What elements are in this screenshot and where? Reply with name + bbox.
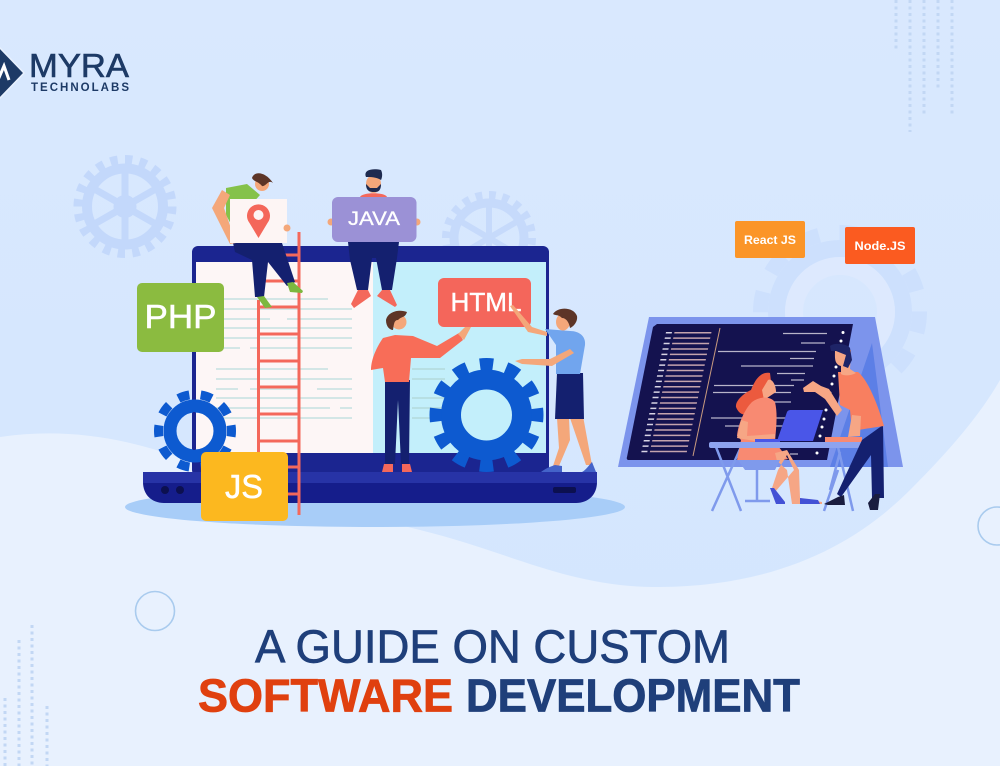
- laptop base highlight: [143, 472, 597, 483]
- text lines on screen left: [215, 299, 352, 418]
- title line 1: A GUIDE ON CUSTOM: [255, 620, 730, 672]
- ladder: [258, 232, 299, 515]
- head: [392, 314, 406, 330]
- white sign: [230, 199, 287, 243]
- hair and beard: [830, 344, 852, 368]
- logo: [0, 47, 129, 98]
- HTML badge: [438, 278, 531, 327]
- person in blue shirt: [510, 305, 596, 472]
- forearm: [848, 415, 861, 437]
- shoes: [351, 290, 397, 308]
- title line 2: DEVELOPMENT: [466, 670, 800, 722]
- legs: [233, 243, 295, 297]
- man standing at board: [803, 344, 884, 510]
- hand: [284, 224, 290, 232]
- shoes: [382, 464, 412, 472]
- background gear left: [78, 160, 172, 254]
- shirt and arm: [371, 333, 463, 382]
- person sitting with Java sign: [328, 169, 420, 308]
- hair: [736, 373, 772, 415]
- head and body: [360, 193, 387, 197]
- JS badge: JS: [225, 468, 263, 505]
- code lines: [711, 334, 827, 454]
- person sitting with map sign: [212, 173, 303, 308]
- React JS tag: React JS: [744, 235, 796, 247]
- HTML badge: HTML: [450, 287, 522, 317]
- shirt: [838, 372, 884, 431]
- decorative circle right: [978, 507, 1000, 545]
- legs: [385, 380, 410, 464]
- board shade: [830, 343, 888, 467]
- shoes: [541, 462, 596, 472]
- shoes: [824, 494, 880, 510]
- person in red shirt: [371, 311, 471, 472]
- code divider: [693, 328, 720, 456]
- laptop shadow: [125, 487, 625, 527]
- PHP badge: PHP: [144, 298, 216, 335]
- title line 2: SOFTWARE: [198, 670, 453, 722]
- JS badge: [201, 452, 288, 521]
- small blue gear: [158, 394, 232, 468]
- legs: [771, 450, 822, 504]
- arm: [212, 190, 236, 244]
- logo name: MYRA: [29, 47, 129, 84]
- text lines on screen right: [412, 369, 445, 418]
- background gear centre: [446, 195, 532, 281]
- screen frame: [192, 246, 549, 476]
- table and chair legs: [712, 447, 853, 511]
- board frame: [618, 317, 903, 467]
- shirt: [226, 184, 260, 226]
- dark screen: [627, 324, 853, 460]
- table top: [709, 442, 865, 448]
- Node.JS tag: [845, 227, 915, 264]
- hands: [328, 218, 334, 226]
- shorts: [555, 373, 584, 419]
- screen left panel: [196, 262, 373, 453]
- shoes: [770, 488, 820, 504]
- laptop buttons: [161, 486, 576, 494]
- code line numbers: [644, 332, 693, 454]
- woman at laptop: [736, 373, 822, 504]
- hand: [458, 326, 471, 340]
- head: [556, 314, 570, 330]
- PHP badge: [137, 283, 224, 352]
- code board: [618, 317, 903, 467]
- decorative circle left: [136, 592, 174, 630]
- logo tagline: TECHNOLABS: [31, 82, 129, 94]
- dot pattern: bottom left: [5, 625, 47, 766]
- Node.JS tag: Node.JS: [854, 241, 906, 253]
- head: [835, 350, 856, 375]
- title: [198, 620, 800, 722]
- sign: [332, 197, 416, 242]
- books on table: [825, 437, 862, 442]
- dot pattern: top right: [896, 0, 952, 132]
- hair: [553, 309, 577, 328]
- hair: [386, 311, 407, 330]
- background wave: [0, 380, 1000, 766]
- code dots: [816, 331, 844, 454]
- laptop base: [143, 472, 597, 503]
- hair and beard: [365, 169, 382, 192]
- shirt: [545, 329, 585, 374]
- chair seat: [738, 460, 780, 470]
- dress: [737, 398, 788, 461]
- icon: location pin: [247, 204, 270, 238]
- React JS tag: [735, 221, 805, 258]
- sign label: JAVA: [348, 209, 400, 230]
- pointing arm: [803, 381, 842, 416]
- shoes: [257, 282, 303, 308]
- background gear right: [760, 232, 920, 392]
- logo diamond icon: [0, 48, 24, 98]
- head: [255, 177, 269, 191]
- arm: [737, 420, 775, 441]
- screen right panel: [373, 262, 546, 453]
- laptop illustration: [125, 246, 625, 527]
- laptop on table: [755, 410, 823, 442]
- legs: [348, 242, 399, 290]
- hair: [252, 173, 273, 186]
- raised arm: [510, 305, 547, 336]
- pointing arm: [515, 349, 574, 366]
- face: [762, 380, 776, 400]
- legs: [553, 416, 592, 466]
- legs: [837, 425, 884, 498]
- large blue gear: [436, 364, 538, 466]
